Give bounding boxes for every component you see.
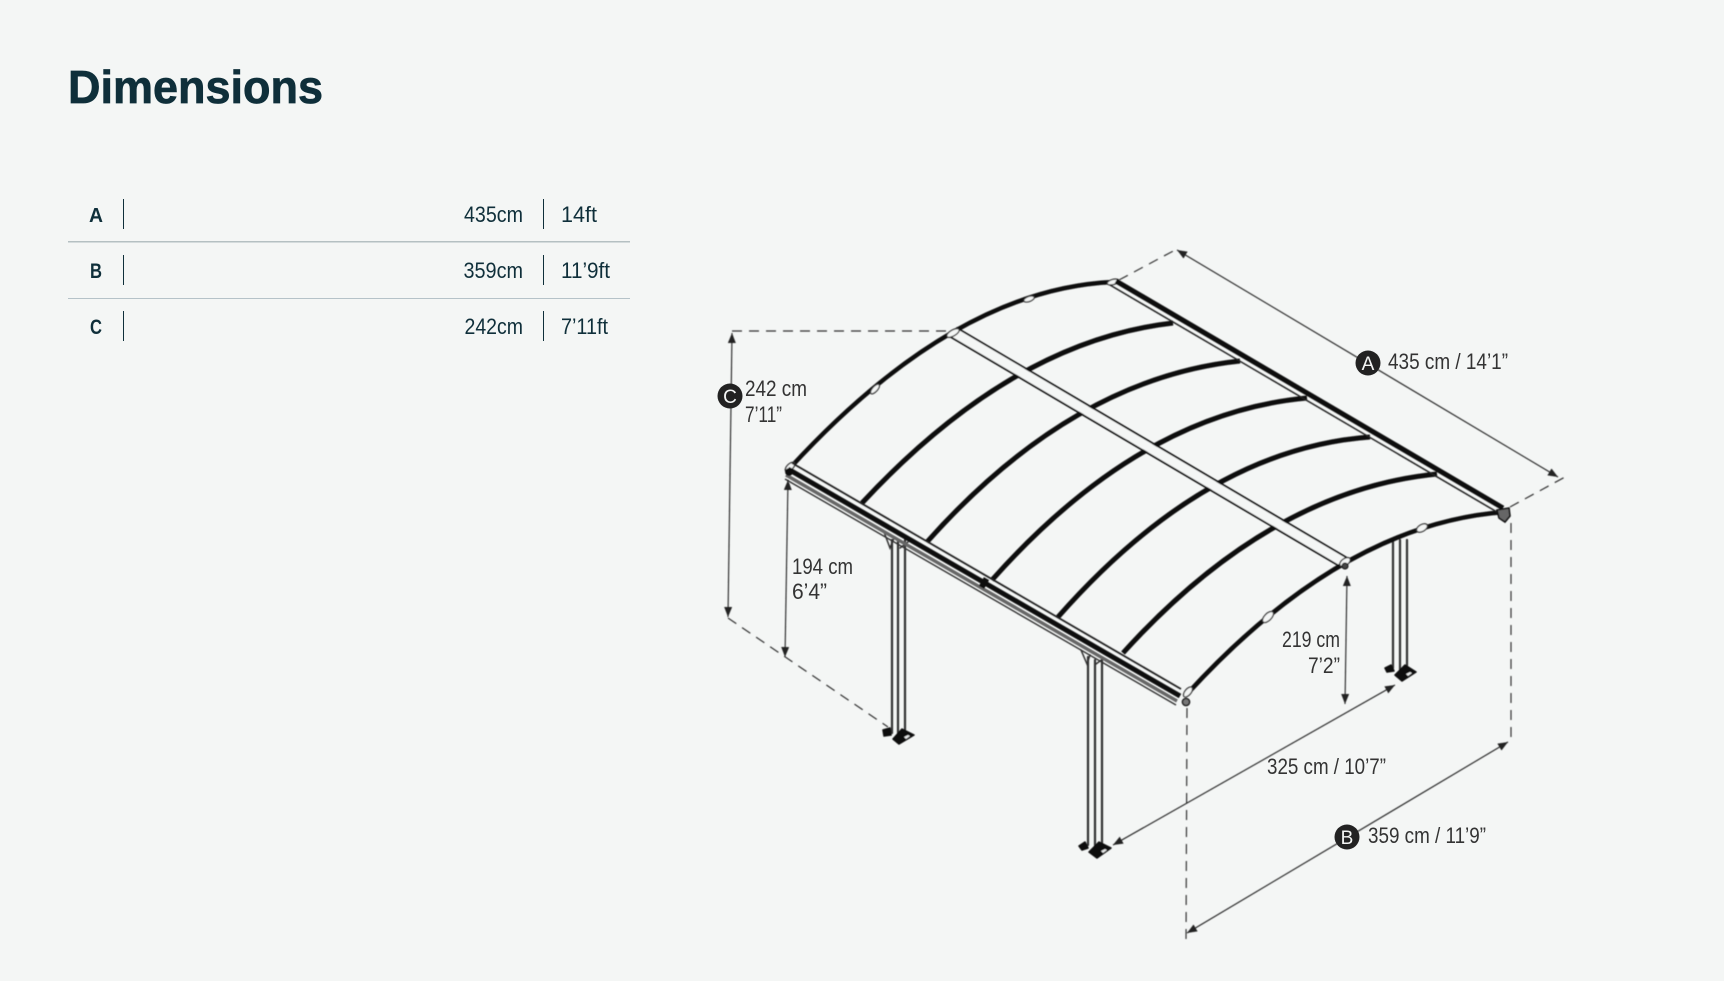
row A: 14ft: [561, 202, 597, 227]
badge A: [1356, 350, 1380, 376]
label 194: [792, 554, 853, 604]
label 219: 219 cm: [1282, 627, 1340, 652]
legs: [884, 532, 1407, 847]
arrow C: [728, 333, 732, 617]
badge A: A: [1362, 354, 1375, 375]
badge B: [1334, 824, 1360, 850]
row B: B: [90, 260, 102, 283]
outer arches: [790, 282, 1505, 693]
row B: 359cm: [464, 258, 523, 283]
label 194: 6’4”: [792, 579, 827, 604]
label 194: 194 cm: [792, 554, 853, 579]
title: Dimensions: [68, 61, 323, 113]
arrow 325: [1113, 685, 1395, 845]
dashed extension lines: [728, 249, 1565, 942]
row B: [90, 255, 610, 285]
label C: 7’11”: [745, 402, 782, 427]
leg base plates: [883, 665, 1416, 858]
row C: C: [90, 316, 102, 339]
row A: 435cm: [464, 202, 523, 227]
front gutter beam: [785, 463, 1181, 705]
row B: 11’9ft: [561, 258, 610, 283]
dimensions table: [68, 199, 630, 341]
badge C: C: [723, 387, 737, 408]
crossbar: [949, 328, 1349, 567]
label C: [745, 376, 807, 427]
row A: A: [89, 205, 103, 227]
back ridge beam: [1110, 281, 1503, 512]
inner roof arches: [862, 323, 1437, 653]
carport line drawing: [784, 278, 1510, 858]
dimension lines: [728, 249, 1565, 942]
row A: [89, 199, 597, 229]
row C: 242cm: [464, 314, 523, 339]
label A: 435 cm / 14’1”: [1388, 349, 1508, 374]
badge C: [718, 384, 742, 408]
arch clips: [784, 278, 1429, 699]
badge B: B: [1341, 828, 1353, 849]
label 219: [1282, 627, 1340, 678]
arrow A: [1177, 250, 1558, 477]
arrow 194: [785, 480, 788, 657]
arrow 219: [1345, 576, 1347, 704]
corner brackets: [786, 469, 1510, 706]
label 219: 7’2”: [1308, 653, 1340, 678]
row C: [90, 311, 608, 341]
arrow B: [1187, 742, 1508, 933]
label B: 359 cm / 11’9”: [1368, 823, 1486, 848]
label 325: 325 cm / 10’7”: [1267, 754, 1386, 779]
row C: 7’11ft: [561, 314, 608, 339]
label C: 242 cm: [745, 376, 807, 401]
